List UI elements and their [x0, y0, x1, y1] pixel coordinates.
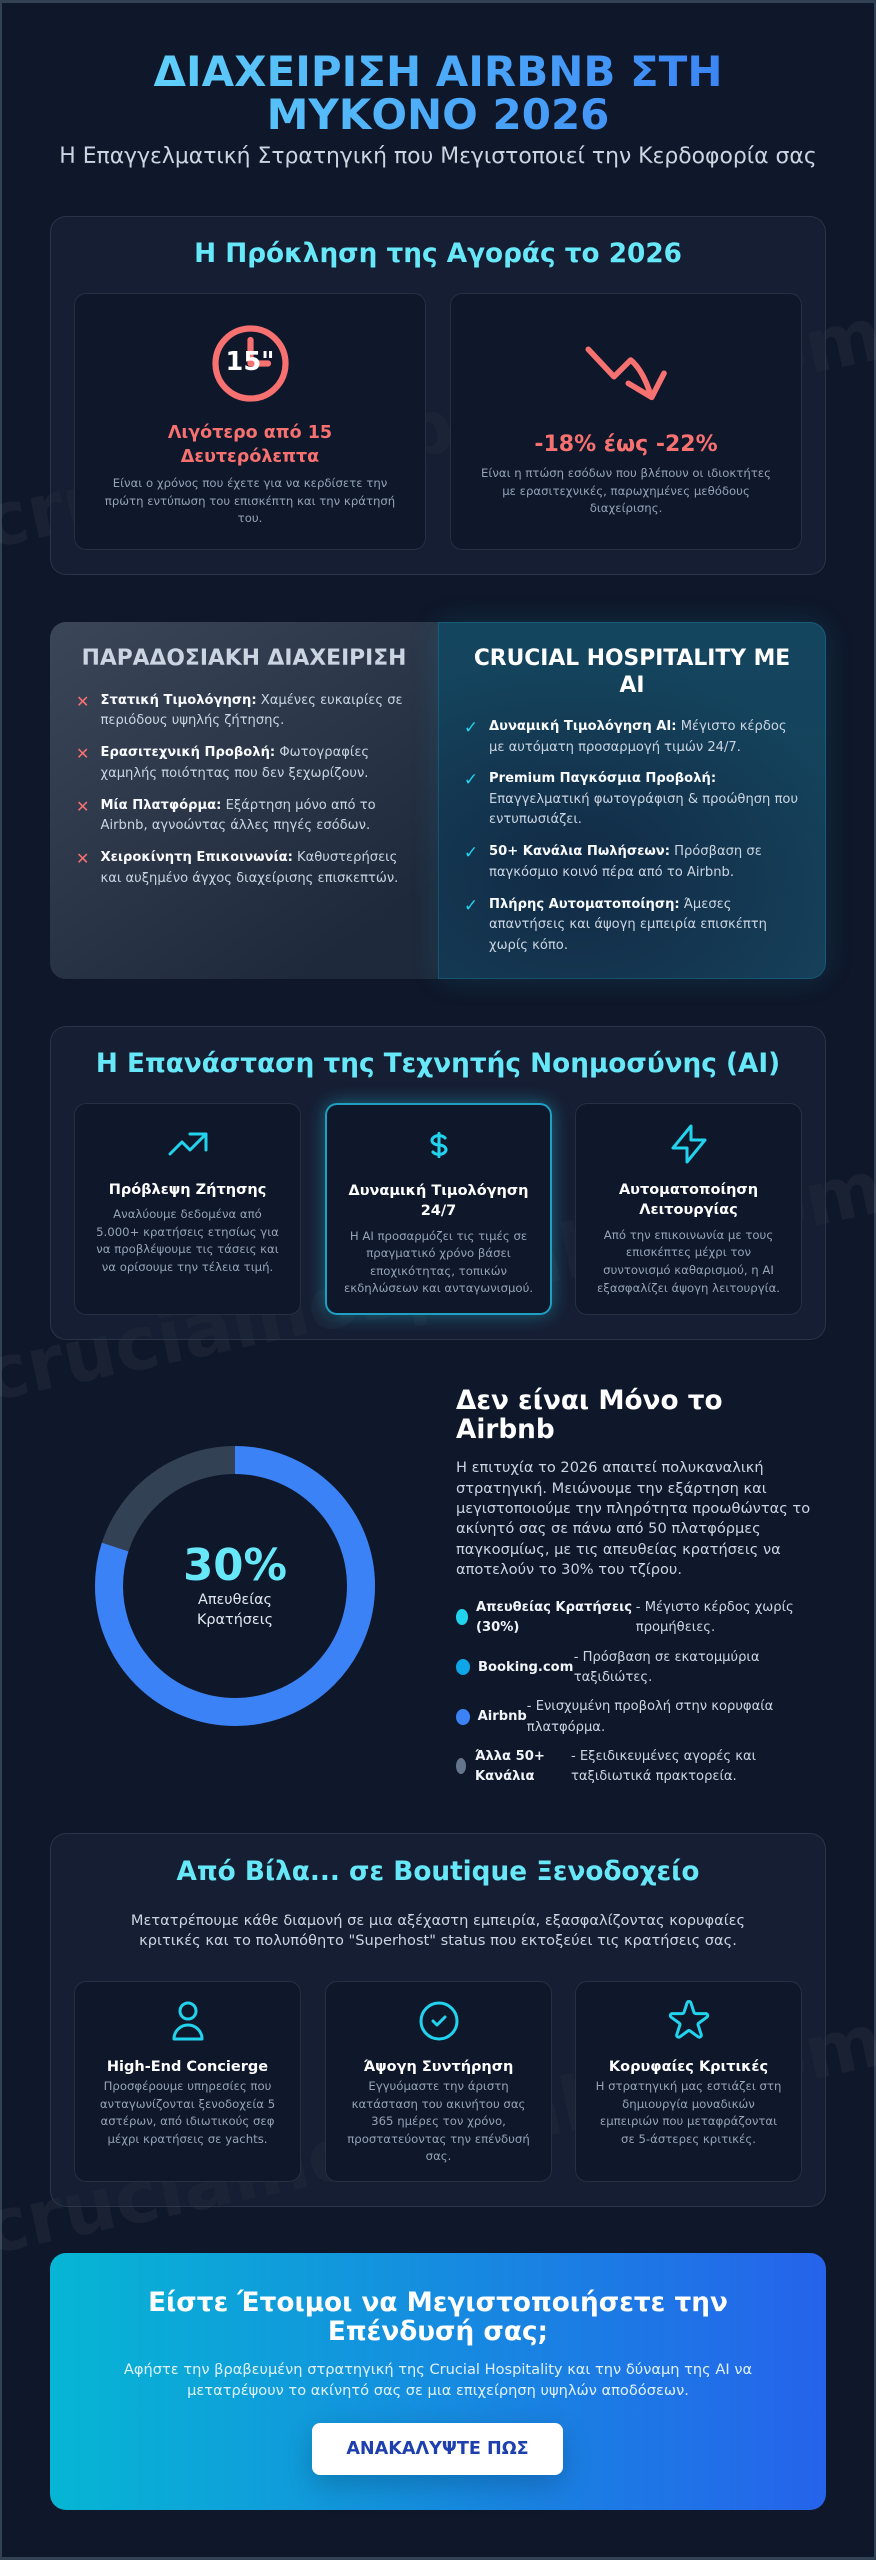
- list item: [76, 744, 369, 781]
- list item: Μία Πλατφόρμα: Εξάρτηση μόνο από το: [100, 798, 376, 813]
- paragraph: [456, 1459, 810, 1578]
- description: [481, 466, 771, 515]
- list item: και αυξημένο άγχος διαχείρισης επισκεπτών.: [100, 871, 398, 886]
- heading: ΠΑΡΑΔΟΣΙΑΚΗ ΔΙΑΧΕΙΡΙΣΗ: [82, 646, 406, 670]
- card text: [597, 1228, 780, 1295]
- card text: εξασφαλίζει άψογη λειτουργία.: [597, 1281, 780, 1295]
- list item: Χειροκίνητη Επικοινωνία: Καθυστερήσεις: [100, 850, 397, 865]
- title: ΜΥΚΟΝΟ 2026: [267, 90, 609, 139]
- list item: [76, 797, 376, 833]
- intro: Μετατρέπουμε κάθε διαμονή σε μια αξέχαστη εμπειρία, εξασφαλίζοντας κορυφαίες: [131, 1912, 745, 1929]
- list item: Δυναμική Τιμολόγηση AI: Μέγιστο κέρδος: [489, 719, 787, 734]
- legend item: booking: Booking.com: [478, 1660, 573, 1675]
- donut label: Απευθείας: [198, 1592, 272, 1608]
- legend item: booking: ταξιδιώτες.: [574, 1670, 652, 1685]
- list item: Στατική Τιμολόγηση: Χαμένες ευκαιρίες σε: [100, 693, 403, 708]
- card: maintenance: [325, 1981, 552, 2182]
- column: crucial hospitality: χωρίς κόπο.: [489, 938, 568, 953]
- icon: star: [664, 1997, 712, 2045]
- heading: Από Βίλα... σε Boutique Ξενοδοχείο: [176, 1857, 700, 1887]
- stat: Δευτερόλεπτα: [181, 446, 319, 466]
- list item: χαμηλής ποιότητας που δεν ξεχωρίζουν.: [100, 766, 368, 781]
- card: demand forecast: [74, 1103, 301, 1315]
- card: reviews: [575, 1981, 802, 2182]
- list item: [76, 849, 398, 886]
- list item: ✕: [76, 797, 89, 816]
- icon: falling arrow: [586, 346, 667, 400]
- stat: Λιγότερο από 15: [168, 423, 332, 443]
- list item: ✓: [464, 843, 478, 863]
- card title: Λειτουργίας: [639, 1202, 738, 1218]
- description: πρώτη εντύπωση του επισκέπτη και την κράτησή: [105, 494, 395, 508]
- card text: αστέρων, από ιδιωτικούς σεφ: [101, 2114, 274, 2128]
- paragraph: στρατηγική. Μειώνουμε την εξάρτηση και: [456, 1480, 767, 1496]
- legend item: direct: Απευθείας Κρατήσεις: [476, 1600, 632, 1615]
- heading: [456, 1386, 723, 1445]
- list item: ✕: [76, 744, 89, 763]
- card text: [347, 2079, 530, 2163]
- list item: ✓: [464, 718, 478, 738]
- card text: Η στρατηγική μας εστιάζει στη: [596, 2079, 781, 2093]
- panel: AI revolution: [50, 1026, 826, 1340]
- donut ring: [95, 1446, 375, 1726]
- card title: Αυτοματοποίηση: [619, 1182, 758, 1198]
- paragraph: μεγιστοποιούμε την πληρότητα προωθώντας το: [456, 1500, 810, 1517]
- card title: Άψογη Συντήρηση: [364, 2059, 513, 2075]
- card text: εκδηλώσεων και ανταγωνισμού.: [344, 1281, 533, 1295]
- legend item: airbnb: Airbnb: [478, 1709, 527, 1724]
- cta button: ΑΝΑΚΑΛΥΨΤΕ ΠΩΣ: [346, 2439, 529, 2459]
- legend item: others: Άλλα 50+: [475, 1749, 545, 1764]
- heading: Η Επανάσταση της Τεχνητής Νοημοσύνης (AI): [96, 1049, 780, 1079]
- list item: ✓: [464, 770, 478, 790]
- legend item: others: - Εξειδικευμένες αγορές και: [571, 1749, 756, 1764]
- card text: σε 5-άστερες κριτικές.: [621, 2132, 756, 2146]
- legend item: airbnb: [456, 1699, 773, 1734]
- legend item: booking: - Πρόσβαση σε εκατομμύρια: [574, 1650, 759, 1664]
- card text: κατάσταση του ακινήτου σας: [352, 2097, 525, 2111]
- subtitle: Η Επαγγελματική Στρατηγική που Μεγιστοποιεί την Κερδοφορία σας: [59, 144, 817, 168]
- card text: εμπειριών που μεταφράζονται: [600, 2114, 777, 2128]
- legend item: direct: [456, 1600, 794, 1635]
- card text: Προσφέρουμε υπηρεσίες που: [104, 2079, 271, 2093]
- card title: Πρόβλεψη Ζήτησης: [109, 1182, 266, 1198]
- description: με ερασιτεχνικές, παρωχημένες μεθόδους: [502, 484, 750, 498]
- list item: παγκόσμιο κοινό πέρα από το Airbnb.: [489, 865, 734, 880]
- donut value: 30%: [183, 1541, 287, 1591]
- list item: Airbnb, αγνοώντας άλλες πηγές εσόδων.: [100, 818, 370, 833]
- list item: ✕: [76, 849, 89, 868]
- card title: [619, 1182, 758, 1218]
- legend item: direct: - Μέγιστο κέρδος χωρίς: [636, 1600, 794, 1615]
- intro: [131, 1912, 745, 1949]
- card title: High-End Concierge: [107, 2059, 268, 2075]
- section: multichannel: [95, 1386, 810, 1784]
- card text: 5.000+ κρατήσεις ετησίως για: [96, 1225, 279, 1239]
- paragraph: ακίνητό σας σε πάνω από 50 πλατφόρμες: [456, 1520, 761, 1537]
- intro: κριτικές και το πολυπόθητο "Superhost" status που εκτοξεύει τις κρατήσεις σας.: [139, 1932, 737, 1949]
- title: [138, 50, 738, 142]
- card text: 365 ημέρες τον χρόνο,: [371, 2114, 506, 2128]
- panel: villa to boutique hotel: [50, 1833, 826, 2207]
- card text: [100, 2079, 275, 2146]
- panel: comparison: [50, 616, 832, 984]
- card text: επισκέπτες μέχρι τον: [626, 1245, 751, 1259]
- cta heading: Είστε Έτοιμοι να Μεγιστοποιήσετε την: [148, 2288, 728, 2318]
- list item: [464, 718, 787, 755]
- list item: περιόδους υψηλής ζήτησης.: [100, 713, 284, 728]
- icon: user: [172, 2002, 204, 2040]
- legend item: direct: προμήθειες.: [636, 1620, 715, 1635]
- heading: Η Πρόκληση της Αγοράς το 2026: [194, 239, 682, 269]
- card text: προστατεύοντας την επένδυσή: [347, 2132, 530, 2146]
- paragraph: παγκοσμίως, με τις απευθείας κρατήσεις να: [456, 1541, 781, 1558]
- column: crucial hospitality: εντυπωσιάζει.: [489, 812, 582, 827]
- list item: απαντήσεις και άψογη εμπειρία επισκέπτη: [489, 917, 767, 932]
- legend item: direct: (30%): [476, 1620, 519, 1635]
- list item: [464, 896, 767, 953]
- heading: Δεν είναι Μόνο το: [456, 1386, 723, 1416]
- list item: [464, 770, 798, 827]
- list item: με αυτόματη προσαρμογή τιμών 24/7.: [489, 740, 741, 755]
- description: Είναι ο χρόνος που έχετε για να κερδίσετε την: [113, 476, 387, 490]
- legend item: others: ταξιδιωτικά πρακτορεία.: [571, 1769, 737, 1784]
- icon: trending up: [168, 1132, 208, 1156]
- paragraph: Η επιτυχία το 2026 απαιτεί πολυκαναλική: [456, 1459, 764, 1476]
- list item: ✕: [76, 692, 89, 711]
- donut label: Κρατήσεις: [197, 1612, 273, 1628]
- list item: 50+ Κανάλια Πωλήσεων: Πρόσβαση σε: [489, 844, 762, 859]
- donut chart: [95, 1446, 375, 1726]
- list item: ✓: [464, 896, 478, 916]
- column: crucial hospitality: [438, 622, 826, 979]
- cta text: Αφήστε την βραβευμένη στρατηγική της Crucial Hospitality και την δύναμη της AI να: [124, 2361, 752, 2378]
- cta text: μετατρέψουν το ακίνητό σας σε μια επιχείρηση υψηλών αποδόσεων.: [187, 2382, 689, 2399]
- card text: ανταγωνίζονται ξενοδοχεία 5: [100, 2097, 275, 2111]
- cta heading: [50, 2289, 826, 2347]
- heading: [474, 646, 790, 698]
- icon: bolt: [671, 1124, 707, 1164]
- heading: CRUCIAL HOSPITALITY ME: [474, 646, 790, 671]
- list item: Premium Παγκόσμια Προβολή:: [489, 771, 716, 786]
- card: automation: [575, 1103, 802, 1315]
- title: ΔΙΑΧΕΙΡΙΣΗ AIRBNB ΣΤΗ: [154, 47, 722, 96]
- icon: dollar: [430, 1132, 448, 1158]
- card text: [575, 2078, 802, 2148]
- card text: δημιουργία μοναδικών: [622, 2097, 755, 2111]
- card title: 24/7: [421, 1203, 456, 1219]
- list item: Ερασιτεχνική Προβολή: Φωτογραφίες: [100, 745, 369, 760]
- header: [59, 47, 817, 168]
- stat: -18% έως -22%: [534, 432, 718, 457]
- card text: Από την επικοινωνία με τους: [604, 1228, 773, 1242]
- cta heading: Επένδυσή σας;: [328, 2317, 548, 2347]
- card title: [348, 1183, 528, 1219]
- heading: Airbnb: [456, 1415, 555, 1445]
- list item: Επαγγελματική φωτογράφιση & προώθηση που: [489, 792, 798, 807]
- card text: [344, 1228, 533, 1295]
- legend item: airbnb: - Ενισχυμένη προβολή στην κορυφαία: [527, 1699, 773, 1714]
- card text: εποχικότητας, τοπικών: [370, 1264, 507, 1278]
- card text: Η AI προσαρμόζει τις τιμές σε: [350, 1228, 527, 1242]
- card: 15 seconds: [74, 293, 426, 550]
- description: του.: [238, 511, 262, 525]
- cta button: [312, 2423, 563, 2475]
- legend item: others: [456, 1749, 756, 1784]
- description: Είναι η πτώση εσόδων που βλέπουν οι ιδιοκτήτες: [481, 466, 771, 480]
- card title: Δυναμική Τιμολόγηση: [349, 1183, 528, 1199]
- heading: AI: [620, 673, 644, 698]
- paragraph: αποτελούν το 30% του τζίρου.: [456, 1561, 682, 1578]
- card text: σας.: [426, 2149, 451, 2163]
- text column: [456, 1386, 810, 1784]
- card text: συντονισμό καθαρισμού, η AI: [603, 1263, 774, 1277]
- description: διαχείρισης.: [590, 501, 662, 515]
- description: [105, 476, 395, 525]
- stat: [168, 423, 332, 466]
- card text: Εγγυόμαστε την άριστη: [368, 2079, 509, 2093]
- column: traditional management: [50, 622, 438, 979]
- legend item: booking: [456, 1650, 759, 1685]
- card text: μέχρι κρατήσεις σε yachts.: [107, 2132, 268, 2146]
- card text: πραγματικό χρόνο βάσει: [366, 1246, 511, 1260]
- card text: να προβλέψουμε τις τάσεις και: [96, 1242, 279, 1256]
- legend item: others: Κανάλια: [475, 1769, 535, 1784]
- panel: market challenge: [50, 216, 826, 575]
- icon: check circle: [420, 2002, 458, 2040]
- card: dynamic pricing: [325, 1103, 552, 1315]
- call to action: [50, 2253, 826, 2510]
- icon: clock: [212, 325, 289, 402]
- card text: [96, 1207, 279, 1274]
- list item: [464, 843, 762, 880]
- clock label: 15": [226, 347, 274, 377]
- list item: Πλήρης Αυτοματοποίηση: Άμεσες: [489, 897, 731, 912]
- card title: Κορυφαίες Κριτικές: [609, 2059, 768, 2075]
- card: revenue drop: [450, 293, 802, 550]
- card text: να ορίσουμε την τέλεια τιμή.: [102, 1260, 273, 1274]
- donut label: [197, 1592, 273, 1628]
- list item: [76, 692, 403, 728]
- cta text: [50, 2360, 826, 2401]
- card: concierge: [74, 1981, 301, 2182]
- legend item: airbnb: πλατφόρμα.: [527, 1720, 605, 1734]
- card text: Αναλύουμε δεδομένα από: [113, 1207, 262, 1221]
